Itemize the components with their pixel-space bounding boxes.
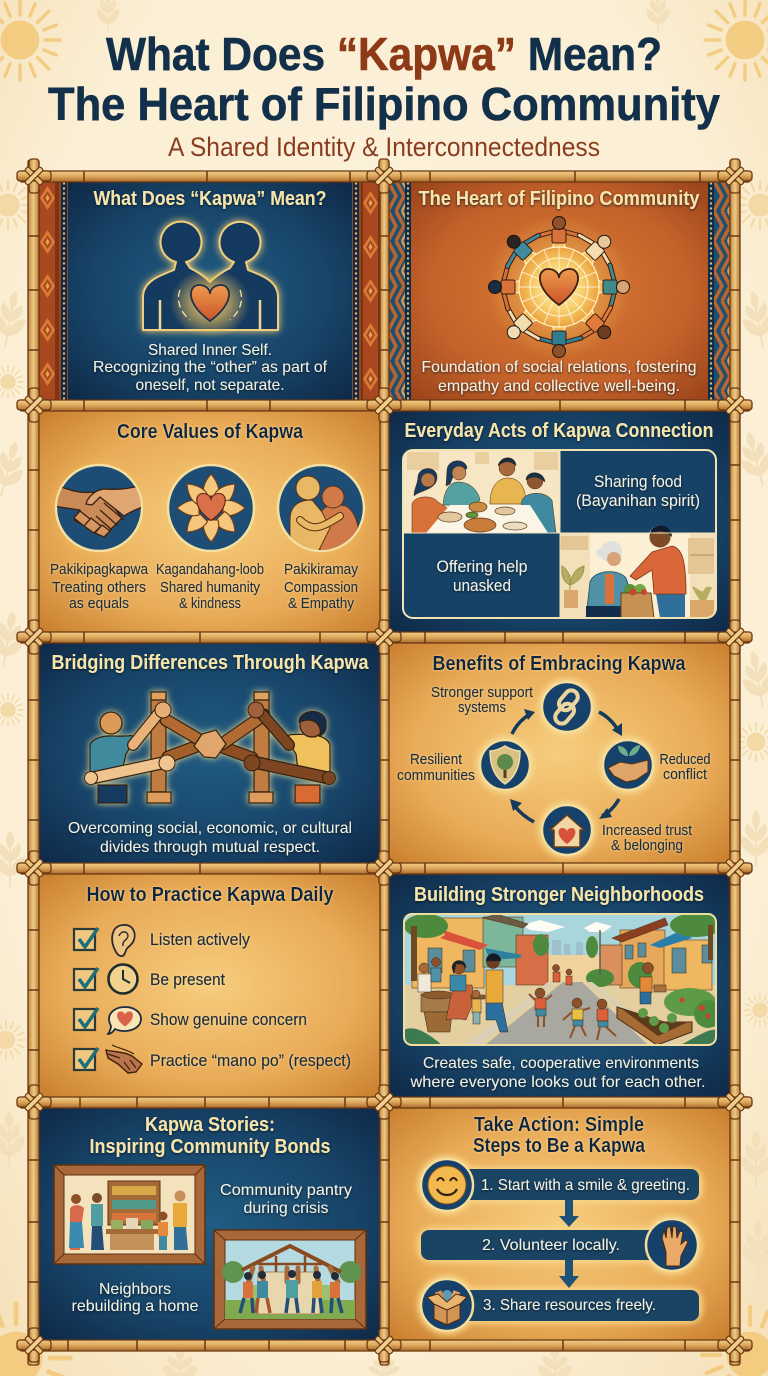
panel: kapwa stories <box>39 1107 381 1340</box>
arrow <box>559 1259 579 1288</box>
labels: Pakikipagkapwa <box>50 562 149 578</box>
description: empathy and collective well-being. <box>438 378 680 395</box>
scene: offering help <box>560 525 717 618</box>
labels: Increased trust <box>602 823 692 839</box>
description <box>409 1055 706 1091</box>
woven strips <box>388 181 731 401</box>
checklist <box>74 925 351 1073</box>
arrows <box>512 712 619 822</box>
labels <box>397 685 710 854</box>
heading: What Does “Kapwa” Mean? <box>94 188 326 210</box>
description: Shared Inner Self. <box>148 342 272 359</box>
heading <box>90 1114 330 1158</box>
captions: during crisis <box>244 1200 328 1217</box>
item: concern <box>74 1007 307 1034</box>
step 1: 1. Start with a smile & greeting. <box>481 1177 690 1194</box>
labels: & Empathy <box>288 596 355 612</box>
scene: offering help caption cell <box>403 533 560 618</box>
description <box>93 342 328 394</box>
labels: Kagandahang-loob <box>156 562 264 578</box>
icon: chain link <box>553 688 580 726</box>
step 2 <box>421 1219 698 1271</box>
panel: bridging differences <box>39 642 381 863</box>
woven strip left <box>40 181 59 401</box>
item: mano po <box>74 1045 351 1073</box>
labels: Treating others <box>52 580 146 596</box>
labels: Compassion <box>284 580 358 596</box>
labels: Shared humanity <box>160 580 261 596</box>
framed scene: rebuilding a home <box>214 1230 366 1329</box>
lower crossing arms <box>166 715 264 758</box>
labels <box>50 562 359 612</box>
labels: communities <box>397 768 475 784</box>
panel: benefits <box>388 642 730 863</box>
caption: Sharing food <box>594 472 682 491</box>
panel: heart of filipino community <box>388 181 731 401</box>
description <box>68 820 352 856</box>
heading: Benefits of Embracing Kapwa <box>432 653 686 675</box>
title: What Does “Kapwa” Mean? <box>106 28 662 80</box>
caption: unasked <box>453 576 511 595</box>
caption: (Bayanihan spirit) <box>576 491 700 510</box>
description: divides through mutual respect. <box>100 839 320 856</box>
labels: conflict <box>663 767 707 783</box>
captions <box>72 1182 352 1315</box>
heading: Everyday Acts of Kapwa Connection <box>404 420 714 442</box>
description: Recognizing the “other” as part of <box>93 359 328 376</box>
card: acts grid <box>403 450 717 618</box>
icon: handshake with sprout <box>608 745 648 782</box>
ring figures <box>488 216 630 358</box>
labels: & belonging <box>611 838 683 854</box>
heading: How to Practice Kapwa Daily <box>86 884 334 906</box>
labels: Resilient <box>410 752 462 768</box>
cycle diagram <box>476 678 657 859</box>
item: mano po: Practice “mano po” (respect) <box>150 1052 351 1070</box>
panel: take action <box>388 1107 730 1340</box>
step 1 <box>421 1159 699 1211</box>
caption <box>576 472 700 510</box>
icon: handshake <box>54 464 144 552</box>
icon: embrace <box>276 464 366 552</box>
heading: Take Action: Simple <box>474 1114 644 1136</box>
description: Foundation of social relations, fostering <box>422 359 696 376</box>
person right <box>285 712 330 803</box>
arrow <box>559 1199 579 1227</box>
description: Creates safe, cooperative environments <box>423 1055 699 1072</box>
labels: Pakikiramay <box>284 562 359 578</box>
scene: sharing food <box>403 450 560 533</box>
captions: Neighbors <box>99 1281 171 1298</box>
description: oneself, not separate. <box>136 377 284 394</box>
description: where everyone looks out for each other. <box>409 1074 706 1091</box>
step 3 <box>421 1279 699 1331</box>
title: The Heart of Filipino Community <box>48 78 720 130</box>
illustration: people joining hands across beams <box>84 692 336 803</box>
captions: Community pantry <box>220 1182 352 1199</box>
heading: Bridging Differences Through Kapwa <box>52 652 369 674</box>
step 3: 3. Share resources freely. <box>483 1297 656 1314</box>
title <box>48 28 720 130</box>
icon: flower with heart <box>159 456 263 560</box>
heading: Inspiring Community Bonds <box>90 1136 330 1158</box>
subtitle: A Shared Identity & Interconnectedness <box>168 132 600 162</box>
labels: systems <box>458 700 506 716</box>
labels: as equals <box>69 596 129 612</box>
heading: Kapwa Stories: <box>145 1114 275 1136</box>
caption <box>436 557 528 595</box>
icon: two people with heart <box>143 222 278 338</box>
person left <box>90 712 137 803</box>
panel: stronger neighborhoods <box>388 873 730 1097</box>
step 2: 2. Volunteer locally. <box>482 1237 620 1254</box>
icon: house with heart <box>550 815 584 847</box>
scene: neighborhood <box>404 913 722 1045</box>
captions: rebuilding a home <box>72 1298 199 1315</box>
icon: shield with tree <box>490 746 520 784</box>
labels: Reduced <box>660 752 710 768</box>
panel: what does kapwa mean <box>39 181 381 401</box>
item: listen: Listen actively <box>150 931 251 949</box>
item: listen <box>74 925 251 956</box>
labels: Stronger support <box>431 685 533 701</box>
item: present <box>74 964 225 994</box>
labels: & kindness <box>179 596 241 612</box>
scene: sharing food caption cell <box>560 450 717 533</box>
item: concern: Show genuine concern <box>150 1011 307 1029</box>
caption: Offering help <box>436 557 528 576</box>
description <box>422 359 696 395</box>
heading: The Heart of Filipino Community <box>418 188 700 210</box>
description: Overcoming social, economic, or cultural <box>68 820 352 837</box>
heading: Steps to Be a Kapwa <box>473 1135 646 1157</box>
panel: everyday acts <box>388 411 730 632</box>
panel: core values <box>39 411 381 632</box>
panel: daily practice <box>39 873 381 1097</box>
item: present: Be present <box>150 971 225 989</box>
steps <box>417 1155 703 1335</box>
woven strip right <box>361 181 380 401</box>
heading <box>473 1114 646 1157</box>
framed scene: community pantry <box>54 1165 205 1264</box>
heading: Core Values of Kapwa <box>117 421 304 443</box>
heading: Building Stronger Neighborhoods <box>414 884 704 906</box>
icon: ring of people with heart <box>487 215 631 359</box>
